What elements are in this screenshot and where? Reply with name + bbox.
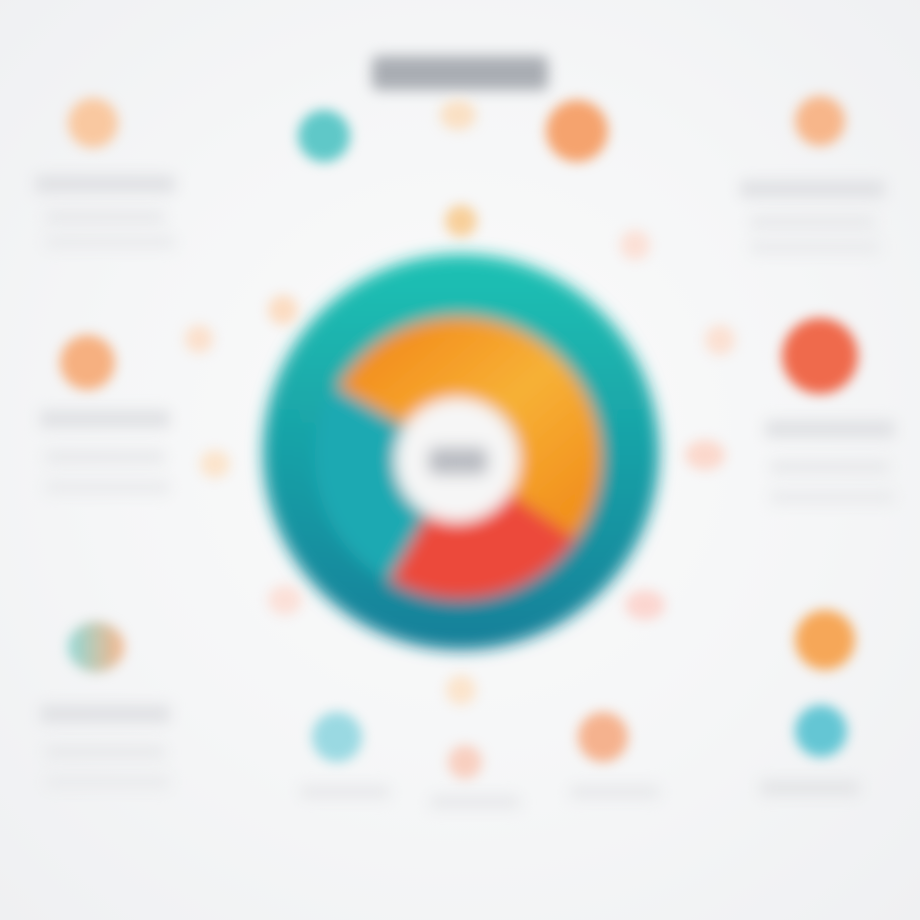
icon: top-left orange [68,98,118,148]
icon: bottom center [446,675,476,705]
center white circle [395,398,519,522]
text block: bottom-left [41,703,171,754]
outer teal disc [263,254,659,650]
text block: top-right [739,178,884,250]
title [372,56,548,90]
center label [428,447,488,475]
orange arc [373,358,560,515]
icon: bottom-left teal/orange [68,622,124,672]
icon: small top center [445,205,477,237]
icon: top small orange [440,100,476,130]
icon: bottom teal [312,712,362,762]
icon: small dots around chart [180,226,739,624]
text block: top-left [36,173,176,244]
red arc [410,515,542,558]
text block: right [764,418,895,500]
icon: bottom-right orange [795,610,855,670]
icon: bottom orange [578,712,628,762]
text blocks: bottom [308,780,856,806]
text block: left [40,408,171,490]
icon: bottom-right teal [795,705,847,757]
icon: right red [782,318,858,394]
title: Title [372,56,409,78]
inner teal segment [315,318,595,598]
icon: top-right orange [795,96,845,146]
icon: left orange [60,335,115,390]
icon: top orange [546,100,608,162]
icon: top teal [298,110,350,162]
